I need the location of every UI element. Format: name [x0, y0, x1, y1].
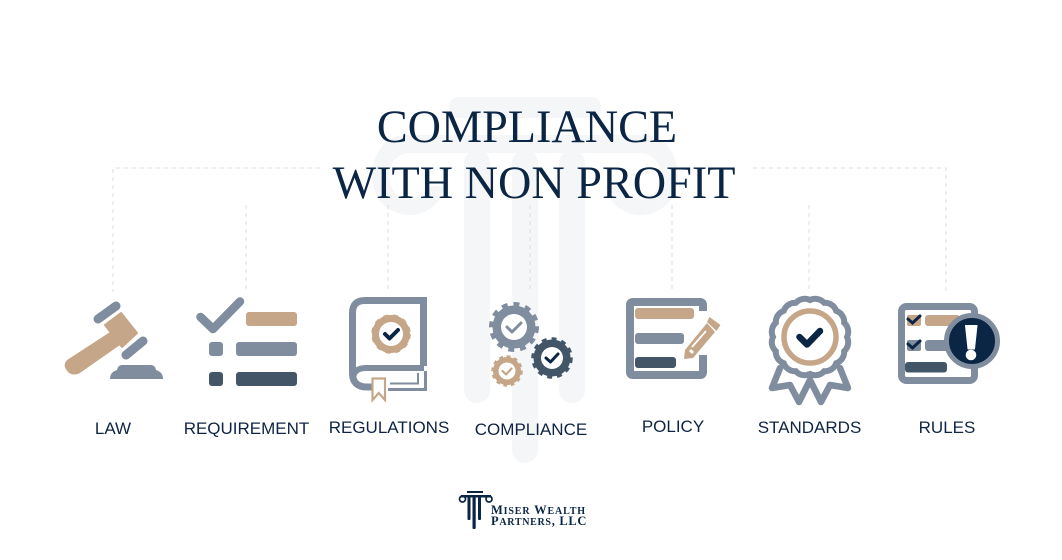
icon: checklist with alert (rules) [902, 306, 998, 380]
watermark: column logo [372, 97, 678, 463]
label: requirement: REQUIREMENT [184, 419, 309, 438]
logo: Miser Wealth Partners: MISER WEALTH [491, 503, 586, 517]
label: standards: STANDARDS [758, 418, 861, 437]
title [333, 101, 735, 208]
label: compliance: COMPLIANCE [475, 420, 587, 439]
icon: checklist (requirement) [200, 302, 297, 386]
label: law: LAW [95, 419, 131, 438]
icon: award rosette (standards) [772, 299, 848, 402]
icon: book with seal (regulations) [352, 300, 426, 400]
icon: document with pencil (policy) [630, 302, 720, 375]
logo: Miser Wealth Partners [460, 491, 587, 529]
label: regulations: REGULATIONS [329, 418, 449, 437]
label: rules: RULES [919, 418, 975, 437]
icon: gavel (law) [65, 306, 163, 379]
icon: gears (compliance) [492, 304, 570, 385]
logo: Miser Wealth Partners: PARTNERS, LLC [491, 514, 587, 528]
title: COMPLIANCE [377, 101, 677, 152]
title: WITH NON PROFIT [333, 157, 735, 208]
label: policy: POLICY [642, 417, 704, 436]
